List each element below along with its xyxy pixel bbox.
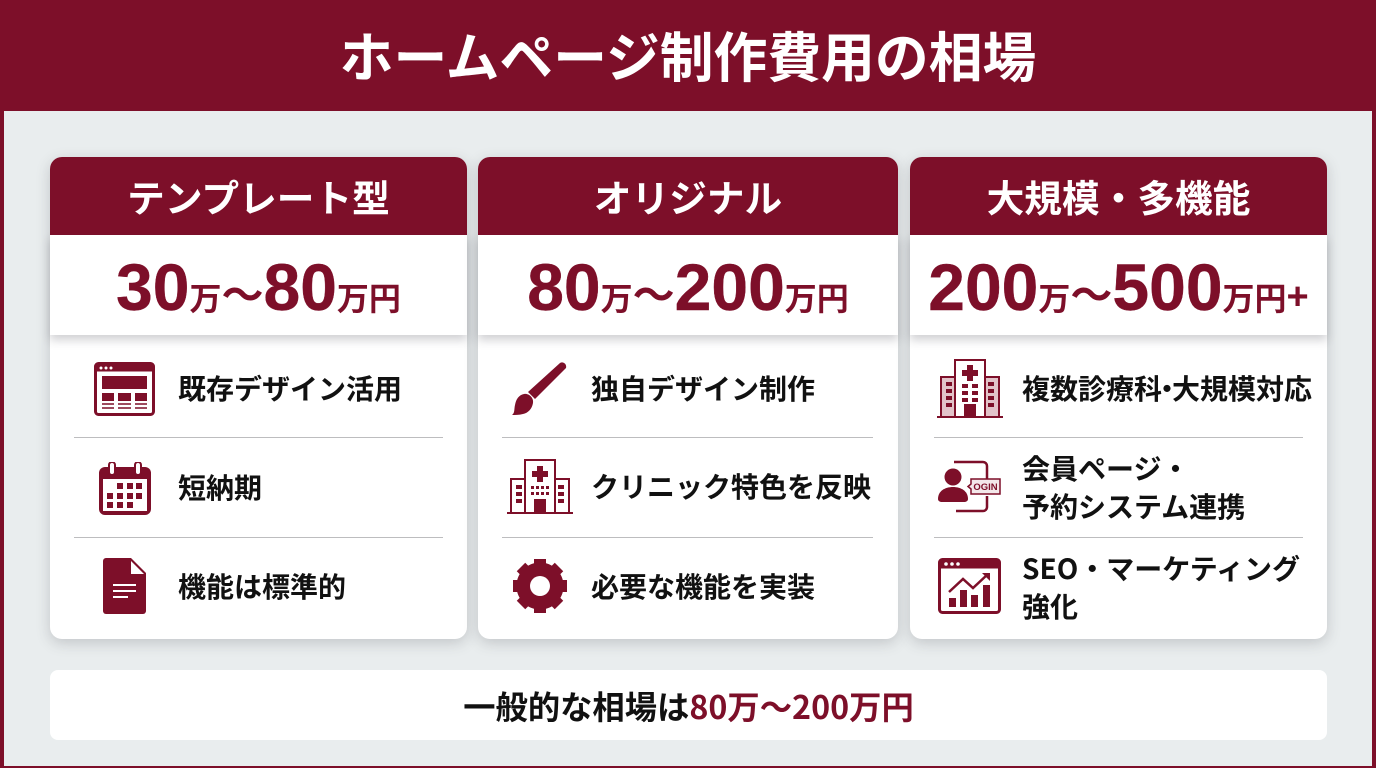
item: member page: 予約システム連携 <box>1022 486 1245 526</box>
price: template <box>50 235 467 335</box>
item: seo marketing: 強化 <box>1022 586 1078 626</box>
icon: member login <box>938 460 1001 512</box>
icon: paint brush <box>512 362 566 415</box>
panel: template type <box>50 157 467 639</box>
card heading: large scale: 大規模・多機能 <box>987 168 1250 223</box>
icon: gear <box>513 559 567 613</box>
price: large scale: 200万～500万円+ <box>928 250 1309 324</box>
price: original <box>478 235 898 335</box>
price: original: 80万～200万円 <box>527 250 849 324</box>
card heading: template <box>50 157 467 235</box>
icon: hospital <box>937 359 1003 418</box>
card heading: large scale <box>910 157 1327 235</box>
item: original design: 独自デザイン制作 <box>591 368 815 408</box>
callout: summary bar <box>50 670 1327 740</box>
item: member page <box>1022 448 1245 526</box>
callout: summary bar: 一般的な相場は80万～200万円 <box>463 683 914 729</box>
icon: seo chart <box>938 558 1001 614</box>
item: existing design: 既存デザイン活用 <box>178 368 402 408</box>
item: seo marketing: SEO・マーケティング <box>1022 548 1300 588</box>
item: member page: 会員ページ・ <box>1022 448 1189 488</box>
price: template: 30万～80万円 <box>116 250 401 324</box>
item: multiple departments: 複数診療科・大規模対応 <box>1022 368 1312 408</box>
item: required features: 必要な機能を実装 <box>591 566 815 606</box>
card heading: original <box>478 157 898 235</box>
panel: original <box>478 157 898 639</box>
icon: clinic building <box>507 459 573 514</box>
icon: member login: OGIN <box>973 482 998 493</box>
item: clinic features: クリニック特色を反映 <box>591 466 871 506</box>
card heading: original: オリジナル <box>594 168 782 223</box>
price: large scale <box>910 235 1327 335</box>
item: standard features: 機能は標準的 <box>178 566 346 606</box>
item: seo marketing <box>1022 548 1300 626</box>
title: ホームページ制作費用の相場 <box>340 16 1036 93</box>
icon: browser layout <box>94 362 155 416</box>
item: short delivery: 短納期 <box>178 467 262 507</box>
card heading: template: テンプレート型 <box>127 168 390 223</box>
icon: calendar <box>99 462 151 515</box>
icon: document <box>103 558 146 614</box>
panel: large scale <box>910 157 1327 639</box>
